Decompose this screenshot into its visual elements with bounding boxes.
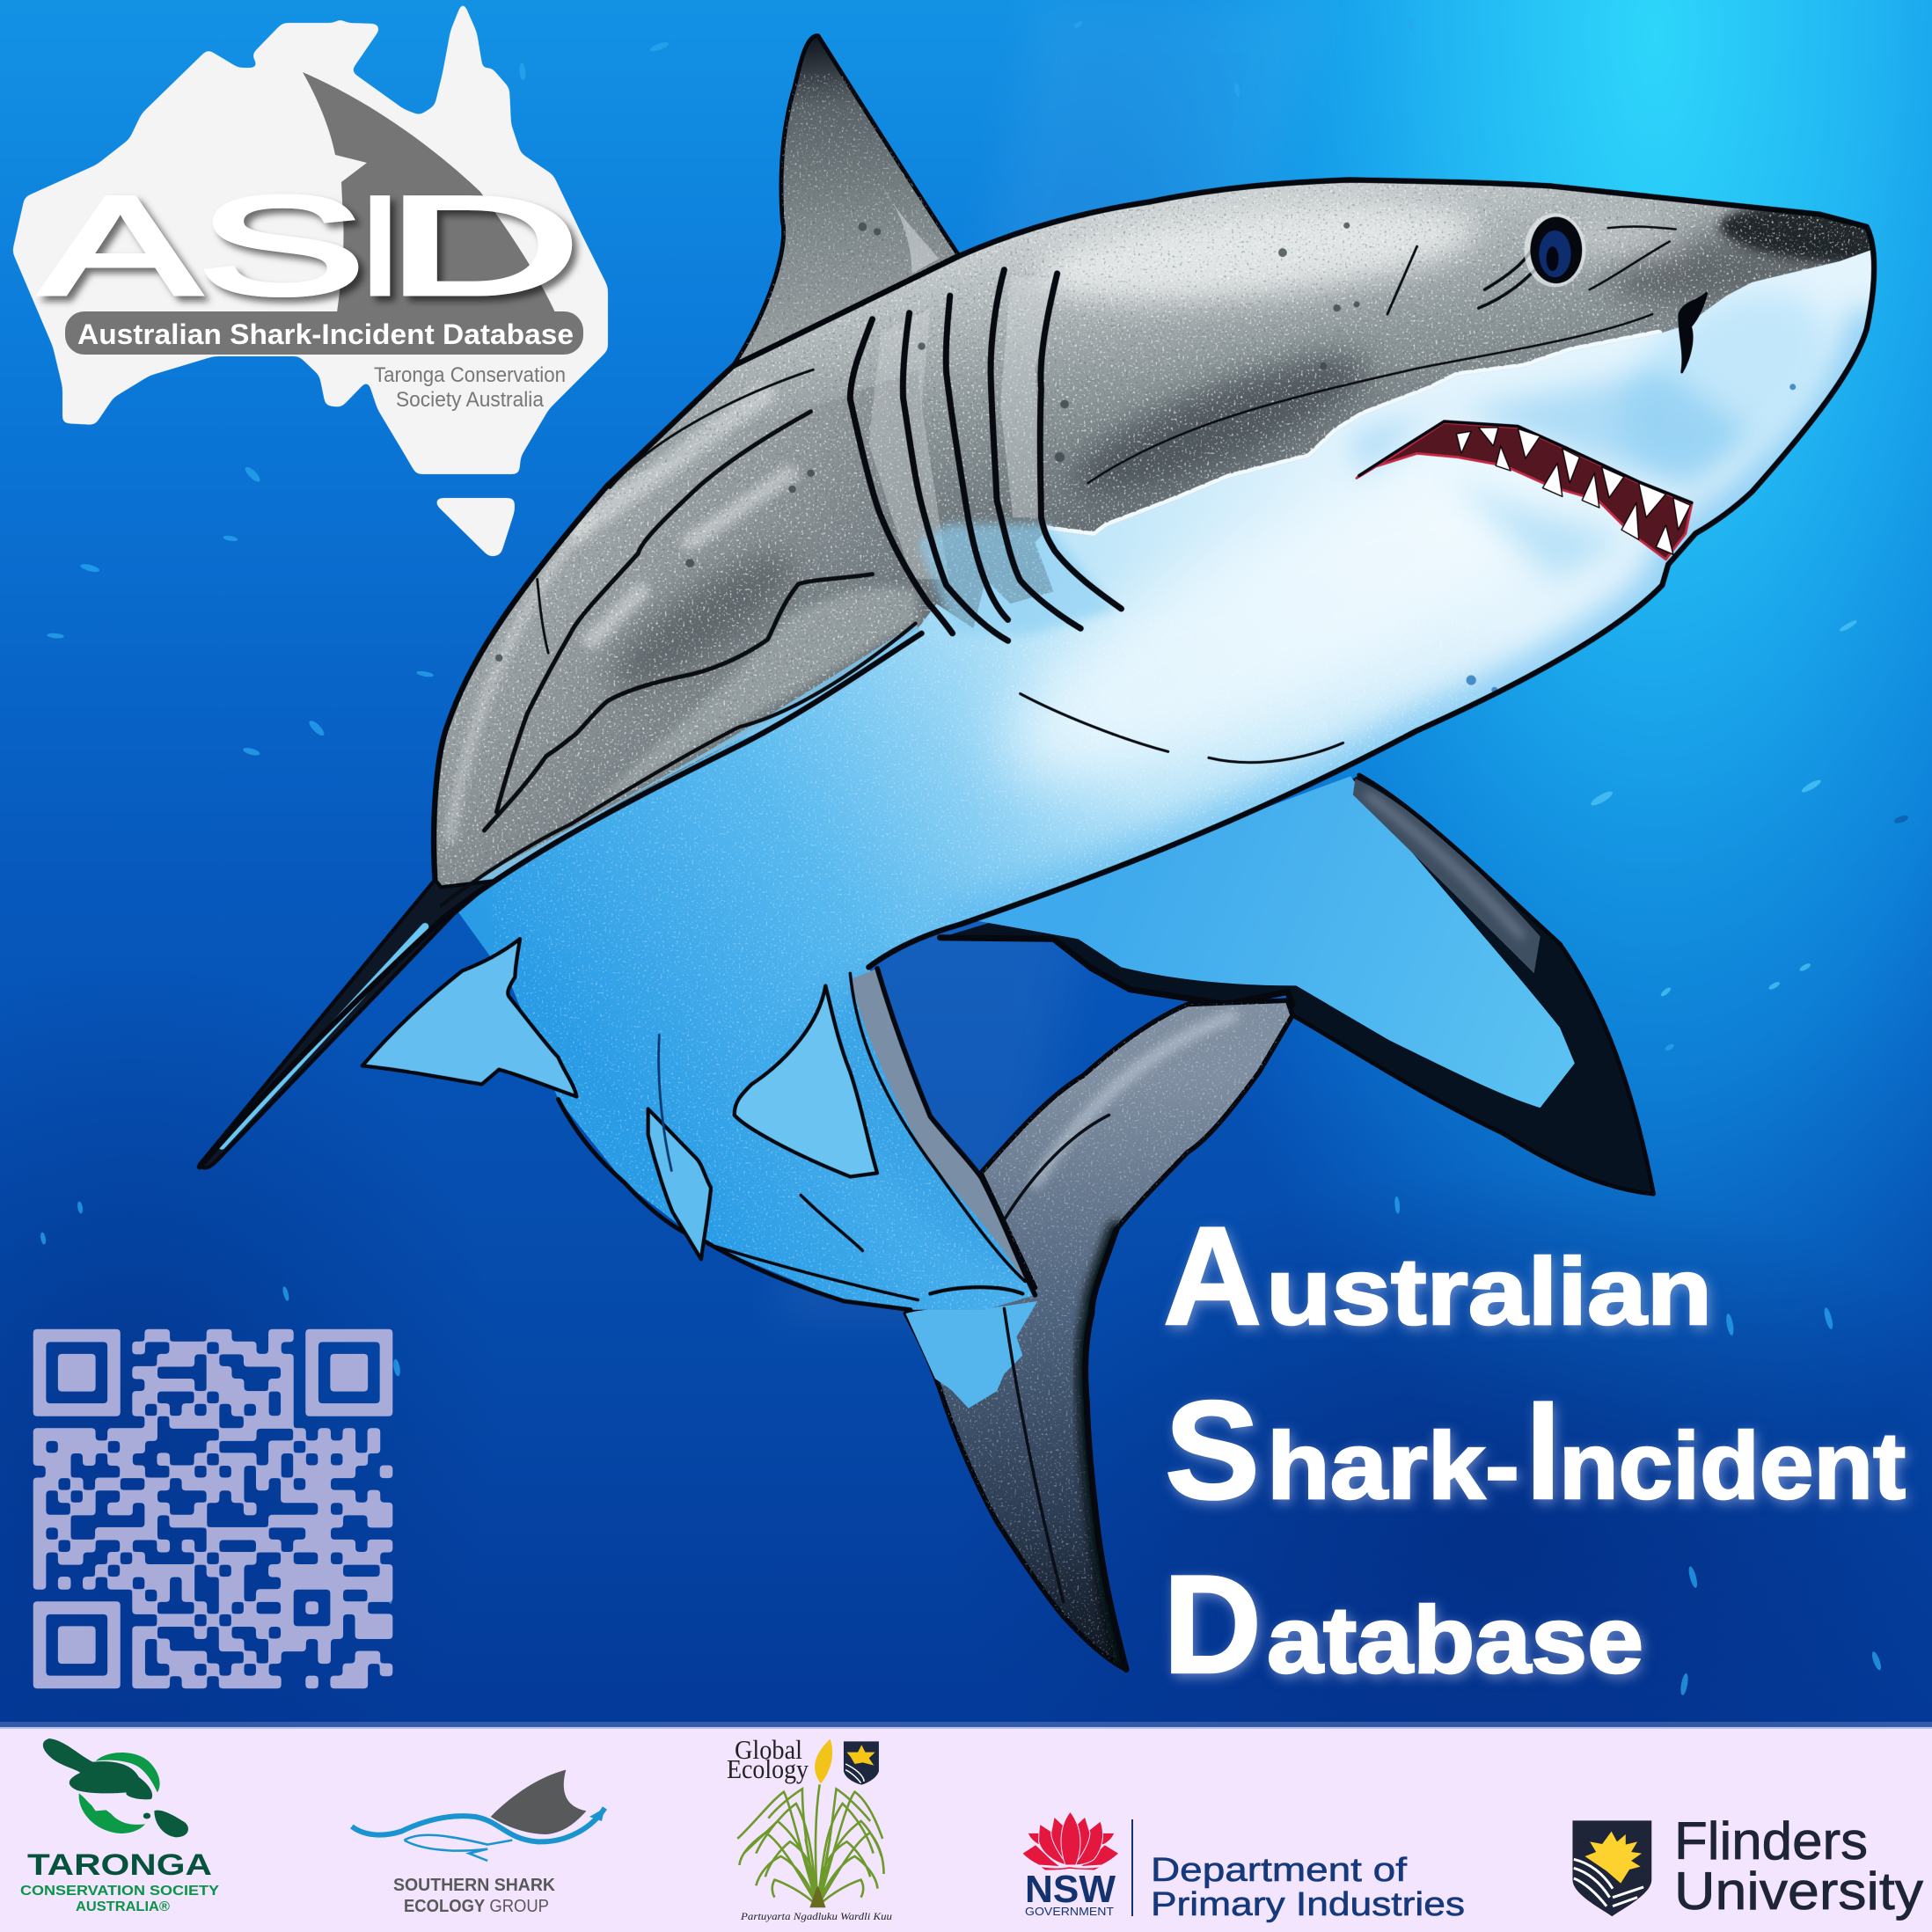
title line 2: S (1165, 1372, 1260, 1528)
shark illustration (200, 36, 1930, 1676)
logo: Flinders University (1572, 1811, 1923, 1921)
logo: Taronga Conservation Society Australia: AUSTRALIA® (76, 1899, 170, 1914)
eye (1524, 213, 1585, 287)
mottled skin marks (495, 223, 1796, 693)
near pectoral fin (200, 370, 922, 1167)
blue wash under gills (918, 523, 1115, 634)
database name pill: Australian Shark-Incident Database (77, 318, 574, 350)
fin and fish emblem (352, 1770, 604, 1861)
logo: Global Ecology: Global (735, 1734, 802, 1765)
body shading (493, 254, 1867, 1356)
ASID wordmark (40, 167, 581, 324)
body top contour and head outline (434, 179, 1874, 967)
plant and shield emblem (737, 1739, 884, 1907)
pelvic fin (362, 939, 576, 1096)
Taronga credit text: Society Australia (396, 388, 545, 412)
body (434, 179, 1874, 1310)
grey back and head (436, 183, 1870, 885)
title line 3: atabase (1267, 1586, 1643, 1693)
rear fin lines and peduncle (659, 969, 1035, 1300)
grey shark fin (303, 72, 555, 312)
logo: Global Ecology: Partuyarta Ngadluku Wardli Kuu (740, 1910, 892, 1922)
mouth with teeth (1357, 421, 1692, 560)
logo footer band (0, 1722, 1932, 1932)
title line 1: A (1163, 1197, 1262, 1354)
logo: NSW Department of Primary Industries: Primary Industries (1151, 1886, 1465, 1923)
title line 3: D (1163, 1546, 1262, 1702)
logo: Taronga Conservation Society Australia: TARONGA (27, 1848, 212, 1882)
Taronga credit text (374, 363, 566, 412)
title line 2 (1165, 1372, 1906, 1528)
logo: Flinders University: University (1674, 1862, 1923, 1921)
gill slits (850, 270, 1121, 640)
far pectoral fin (940, 775, 1653, 1194)
Taronga credit text: Taronga Conservation (374, 363, 566, 387)
logo: NSW Department of Primary Industries: NSW (1025, 1868, 1116, 1911)
ASID wordmark: D (385, 167, 581, 324)
title line 1 (1163, 1197, 1712, 1354)
ASID wordmark: S (197, 167, 366, 324)
nostril mark (1680, 293, 1707, 372)
dorsal fin (727, 36, 973, 370)
logo: NSW Department of Primary Industries (1022, 1811, 1465, 1923)
logo: NSW Department of Primary Industries: Department of (1151, 1852, 1408, 1889)
waratah emblem (1022, 1811, 1119, 1870)
title line 2: ncident (1559, 1412, 1906, 1519)
ASID logo (12, 0, 608, 557)
title line 3 (1163, 1546, 1643, 1702)
ASID wordmark: A (40, 167, 200, 324)
logo: Taronga Conservation Society Australia: CONSERVATION SOCIETY (20, 1884, 219, 1899)
head line details (1021, 227, 1676, 763)
logo: Global Ecology: Ecology (727, 1753, 809, 1784)
logo: Flinders University: Flinders (1674, 1811, 1868, 1870)
QR code (33, 1329, 392, 1688)
ASID wordmark: I (358, 167, 402, 324)
title: Australian Shark-Incident Database (1163, 1197, 1906, 1702)
logo: Southern Shark Ecology Group: ECOLOGY GROUP (404, 1897, 549, 1916)
logo: Southern Shark Ecology Group: SOUTHERN SHARK (393, 1876, 556, 1895)
database name pill (65, 311, 583, 355)
anal fin (648, 1109, 711, 1259)
turtle emblem (43, 1738, 188, 1837)
title line 2: I (1526, 1372, 1560, 1528)
logo: Global Ecology (727, 1734, 892, 1922)
title line 2: hark- (1267, 1412, 1519, 1519)
lower body outline (558, 1099, 911, 1310)
logo: Taronga Conservation Society Australia (20, 1738, 219, 1914)
title line 1: ustralian (1266, 1238, 1712, 1344)
logo: Southern Shark Ecology Group (352, 1770, 604, 1916)
Australia map silhouette (12, 0, 608, 557)
logo: NSW Department of Primary Industries: GOVERNMENT (1025, 1905, 1114, 1918)
Flinders shield emblem (1572, 1820, 1651, 1916)
tail fin (899, 985, 1306, 1676)
